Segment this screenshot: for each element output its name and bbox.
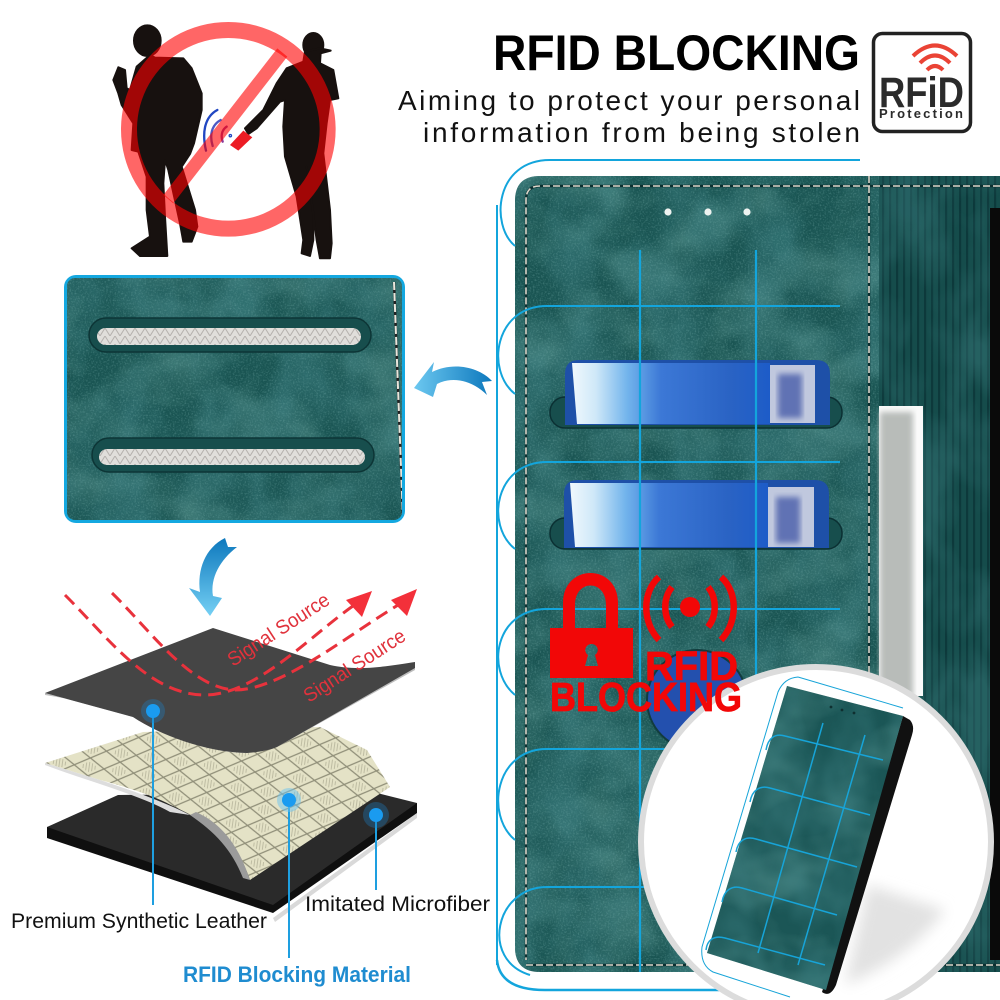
illustration: wireless theft prohibited: [113, 22, 338, 258]
panel: leather card slots close-up: [64, 275, 405, 523]
callout: microfiber pointer: [363, 802, 389, 890]
arrow: down to layers: [189, 538, 237, 616]
logo text: BLOCKING: [550, 674, 742, 720]
layer: microfiber bottom: [47, 793, 417, 922]
icon: radio signal: [646, 577, 734, 640]
prohibition sign: [121, 22, 336, 237]
badge text: Protection: [879, 106, 963, 121]
label: signal source 1: Signal Source: [224, 589, 334, 671]
card slot pocket 2: [550, 480, 842, 549]
card slot 2: [92, 438, 374, 472]
wallet shadow: [845, 885, 945, 985]
icon: wifi arcs: [913, 46, 957, 70]
inset wallet: [700, 677, 915, 1000]
inset grid lines: [702, 677, 903, 997]
layered material diagram: [11, 589, 490, 987]
stitching: [526, 176, 1000, 965]
blue line grid: [497, 160, 860, 990]
label: signal source 2: Signal Source: [300, 625, 410, 707]
badge: RFID Protection: [874, 34, 970, 132]
subheading text: Aiming to protect your personal: [398, 85, 860, 116]
white insert card: [879, 406, 923, 697]
phone edge: [990, 208, 1000, 960]
inset circle: wallet angled view: [641, 667, 991, 1000]
card slot pocket 1: [550, 360, 842, 428]
silhouette: thief with scanner: [245, 33, 338, 258]
card slot 1: [89, 318, 371, 352]
inset speaker dots: [830, 706, 855, 714]
silhouette: victim with phone: [113, 25, 202, 256]
layer: synthetic leather top: [45, 628, 415, 753]
heading: RFID BLOCKING: RFID BLOCKING: [493, 25, 860, 81]
signal source dashed paths: [65, 593, 412, 695]
badge text: RFiD: [879, 69, 964, 117]
speaker dots: [664, 208, 751, 216]
label: Imitated Microfiber: Imitated Microfiber: [305, 893, 490, 916]
subheading text: information from being stolen: [423, 117, 860, 148]
wallet photo: [497, 160, 1000, 990]
blue logo disc: [647, 650, 747, 750]
arrow: to close-up panel: [414, 362, 492, 397]
mesh curl edge: [190, 812, 250, 880]
callout: RFID material pointer: [277, 788, 301, 958]
label: Premium Synthetic Leather: Premium Synthetic Leather: [11, 910, 267, 933]
icon: signal waves: [204, 110, 231, 151]
icon: padlock: [550, 573, 633, 678]
label: RFID Blocking Material: RFID Blocking Material: [183, 962, 411, 987]
callout: leather pointer: [141, 699, 165, 905]
wallet spine ribs: [879, 176, 1000, 972]
icon: red scanner card: [230, 131, 252, 151]
logo text: RFID: [645, 643, 738, 689]
RFID blocking logo: [550, 573, 742, 720]
arrowheads: [346, 589, 417, 617]
layer: RFID blocking mesh: [45, 727, 390, 880]
subheading text: [398, 85, 860, 148]
stitching: [394, 282, 403, 520]
logo text: [550, 643, 742, 720]
